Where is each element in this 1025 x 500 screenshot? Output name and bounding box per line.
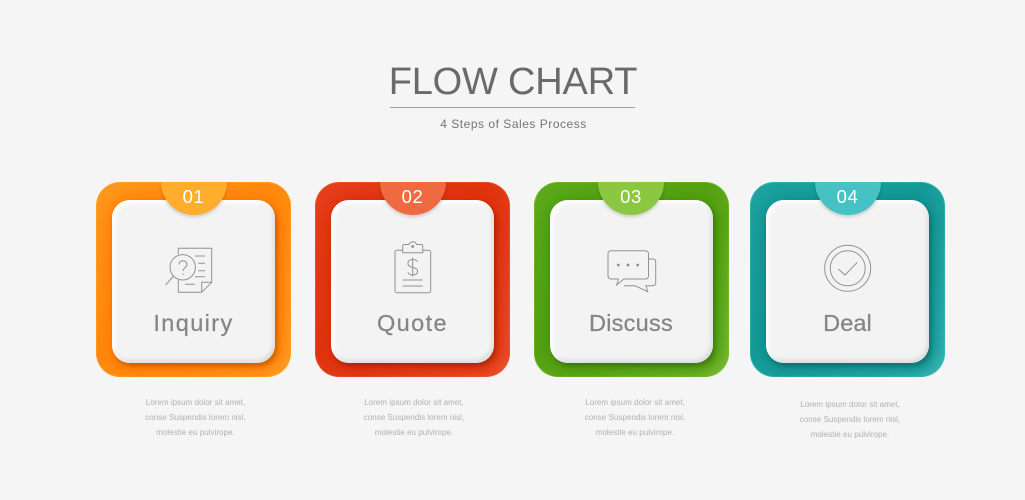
caption 4: conse Suspendis lorem nisl,: [800, 415, 900, 424]
caption 4: molestie eu pulvirope.: [811, 430, 889, 439]
caption 2: [364, 398, 464, 437]
white card: [331, 200, 494, 363]
caption 1: molestie eu pulvirope.: [156, 428, 235, 437]
caption 2: molestie eu pulvirope.: [375, 428, 453, 437]
number tab: [160, 182, 228, 218]
red frame: [315, 182, 510, 377]
caption 2: conse Suspendis lorem nisl,: [364, 413, 464, 422]
orange frame: [96, 182, 291, 377]
caption 1: [145, 398, 246, 437]
caption 4: Lorem ipsum dolor sit amet,: [800, 400, 900, 409]
number: 04: [837, 186, 858, 207]
caption 1: conse Suspendis lorem nisl,: [145, 413, 246, 422]
icon: document with magnifier: [165, 248, 212, 293]
caption 3: molestie eu pulvirope.: [596, 428, 674, 437]
caption 3: Lorem ipsum dolor sit amet,: [585, 398, 685, 407]
caption 3: [585, 398, 685, 437]
step 3: discuss: [534, 182, 729, 377]
label: Quote: [377, 310, 448, 336]
caption 4: [800, 400, 900, 439]
white card: [550, 200, 712, 363]
title: FLOW CHART: [389, 61, 637, 103]
number tab: [379, 182, 447, 218]
label: Discuss: [589, 310, 673, 336]
icon: speech bubbles: [608, 250, 656, 292]
step 4: deal: [750, 182, 945, 377]
step 2: quote: [315, 182, 510, 377]
number tab: [814, 182, 882, 218]
green frame: [534, 182, 728, 377]
label: Deal: [823, 310, 872, 336]
caption 2: Lorem ipsum dolor sit amet,: [364, 398, 464, 407]
number: 03: [620, 186, 642, 207]
caption 3: conse Suspendis lorem nisl,: [585, 413, 685, 422]
caption 1: Lorem ipsum dolor sit amet,: [146, 398, 245, 407]
label: Inquiry: [153, 310, 234, 336]
icon: clipboard with dollar: [394, 241, 432, 294]
title underline: [390, 107, 635, 108]
step 1: inquiry: [96, 182, 291, 377]
number: 02: [402, 186, 423, 207]
number: 01: [183, 186, 204, 207]
white card: [112, 200, 275, 363]
subtitle: 4 Steps of Sales Process: [440, 117, 587, 131]
teal frame: [750, 182, 945, 377]
number tab: [597, 182, 665, 218]
icon: check in double circle: [824, 244, 872, 292]
white card: [766, 200, 929, 363]
